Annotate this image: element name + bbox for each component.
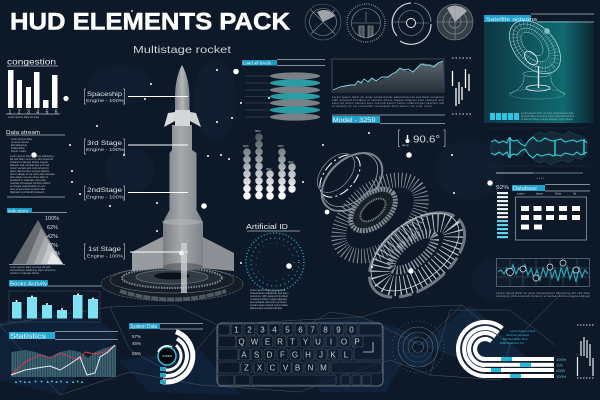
books activity tab: [9, 280, 48, 286]
artificial ID heading: Artificial ID: [246, 222, 289, 231]
statistics tab: [9, 332, 55, 339]
key outlines: [218, 324, 382, 385]
chart caption: Lorem ipsum dolor sit amet consectetuer adipiscing elit sed diam nonummy: [332, 95, 445, 99]
number row: 2: [247, 326, 252, 334]
column labels: [243, 129, 294, 171]
white bars: [485, 357, 554, 378]
home row: K: [330, 350, 336, 360]
rocket collar: [175, 110, 190, 126]
data stream text: molestie consequat vel illum dolore: [10, 181, 51, 185]
bottom wave: [491, 149, 587, 158]
temperature readout: [398, 130, 445, 147]
temperature readout: 90.6°: [413, 134, 440, 146]
data stream text: elit sed diam nonummy nibh euismod: [10, 157, 53, 161]
satellite tab: [484, 15, 531, 22]
turbine nodes: [325, 210, 414, 274]
row labels: 100: [556, 362, 563, 368]
data stream text: tincidunt ut laoreet dolore magna: [10, 160, 48, 164]
qwerty row: T: [290, 338, 295, 346]
panel: model bar: Model - 3259: [332, 117, 376, 124]
panel: waveform: [488, 128, 590, 180]
percent labels: 100%: [45, 216, 59, 222]
scale: [496, 172, 583, 174]
leader lines: [245, 76, 271, 117]
front housing: [354, 196, 480, 314]
bottom row: N: [308, 364, 314, 372]
white rings: [458, 322, 502, 376]
faint world map: [88, 60, 528, 302]
data stream text: minim veniam quis nostrud exerci: [10, 166, 49, 170]
data stream text: Nulla facilisi: [11, 146, 25, 150]
column headers: Dolor: [555, 192, 561, 196]
area fill: [333, 61, 444, 91]
home row: [241, 350, 349, 360]
icon: thermometer: [406, 135, 408, 141]
bottom row: Z: [244, 364, 249, 372]
label: 3rd stage: 3rd Stage: [87, 140, 122, 147]
caption: [10, 265, 56, 275]
column labels: 62%: [243, 144, 249, 148]
panel: data stream: [6, 130, 65, 197]
database tab: [512, 185, 545, 191]
database box: [516, 197, 586, 240]
panel: waveform: • • • •: [537, 176, 544, 180]
ID caption: erat volutpat wisi enim ad minim: [250, 300, 287, 304]
data stream text: duis autem vel eum iriure dolor in: [10, 175, 49, 179]
pyramid: [12, 220, 63, 264]
label: 2nd stage: Engine - 100%: [86, 194, 125, 200]
ring labels: Sit Amet Consect: [506, 333, 529, 337]
data stream text: Lorem ipsum dolor: [11, 137, 33, 141]
qwerty row: U: [315, 338, 321, 346]
ID caption: ullamcorper suscipit lobortis: [250, 306, 283, 310]
number row: [234, 326, 354, 334]
label: 1st stage: Engine - 100%: [87, 254, 124, 260]
home row: A: [241, 350, 247, 360]
outer spoke fan: [325, 165, 435, 271]
data stream text: hendrerit in vulputate velit esse: [10, 178, 46, 182]
panel: books activity bar chart: Books Activity: [10, 282, 47, 288]
ID caption: ut laoreet dolore magna aliquam: [250, 297, 287, 301]
qwerty row: R: [277, 338, 283, 346]
panel: C-shaped ring chart: [458, 322, 567, 379]
bottom row: [244, 364, 327, 372]
dotted ring: [246, 233, 304, 291]
caption: tincidunt ut laoreet dolore: [10, 271, 40, 275]
panel: database: [496, 184, 590, 240]
column headers: [517, 192, 576, 196]
panel: artificial ID: [246, 222, 304, 310]
panel: area line chart: [332, 59, 445, 108]
indicators tab: [7, 208, 32, 213]
qwerty row: Q: [238, 338, 245, 346]
data stream text: sit amet consec: [11, 140, 30, 144]
ID caption: nonummy nibh euismod tincidunt: [250, 294, 288, 298]
panel: load levels ellipse stack: Load all levels: [243, 60, 272, 66]
data stream heading: Data stream: [6, 130, 40, 136]
column labels: 40%: [288, 160, 294, 164]
number row: 9: [336, 326, 341, 334]
panel: statistics chart: Statistics: [10, 334, 47, 340]
candlestick glyph: [452, 58, 471, 114]
wave spikes: [510, 137, 584, 158]
home row: H: [305, 350, 311, 360]
icon: lock row: [490, 113, 519, 120]
percent labels: 42%: [47, 234, 58, 240]
red line: [11, 347, 113, 375]
bottom row: C: [270, 364, 276, 372]
row labels: 2000: [556, 368, 566, 373]
chart caption: [332, 95, 445, 108]
home row: S: [254, 350, 259, 360]
bottom row: M: [320, 364, 327, 372]
qwerty row: P: [354, 338, 360, 346]
faint envelope: [491, 131, 587, 165]
rocket labels: [84, 89, 125, 260]
radar gauges: [305, 3, 473, 44]
satellite caption: elit sed diam nonummy nibh euismod tincidunt: [521, 114, 574, 118]
price line: [333, 61, 443, 90]
columns: [247, 137, 292, 196]
white line: [11, 345, 115, 375]
home row: L: [344, 350, 349, 360]
front inner grid: [386, 227, 440, 277]
label: 3rd stage: Engine - 100%: [86, 147, 125, 153]
congestion heading: congestion: [7, 56, 56, 66]
qwerty row: O: [341, 338, 347, 346]
icon: satellite dish wireframe: [499, 11, 571, 99]
satellite caption: Lorem ipsum dolor sit amet consectetuer adip: [521, 111, 574, 115]
signal caption: [496, 291, 590, 298]
data stream text: Lorem ipsum dolor sit amet adipiscing: [10, 154, 54, 158]
number row: 8: [323, 326, 328, 334]
panel: load levels ellipse stack: [242, 60, 325, 121]
satellite caption: ut laoreet dolore magna aliquam erat volutpa: [521, 117, 573, 121]
temperature readout: temp: [402, 143, 409, 147]
panel: books activity bar chart: [9, 280, 101, 322]
home row: F: [280, 350, 285, 360]
chart caption: ut aliquip ex ea commodo consequat duis autem vel eum iriure: [332, 104, 433, 108]
label: 1st stage: 1st Stage: [88, 246, 121, 253]
panel: signal chart: [496, 258, 590, 298]
rear rings: [310, 147, 362, 199]
title: HUD ELEMENTS PACK: [10, 8, 291, 36]
gauge 2: [347, 4, 385, 42]
panel: model bar: [332, 115, 445, 124]
data stream text: tation ullamcorper suscipit lobortis: [10, 169, 50, 173]
signal caption: nonummy nibh euismod tincidunt ut laoreet dolore magna aliquam: [496, 294, 590, 298]
percent labels: 15%: [49, 251, 60, 257]
signal trace: [498, 265, 588, 282]
row labels: 100%: [556, 374, 567, 379]
load levels tab: [242, 60, 277, 66]
ring labels: Elit Sed Diam Non: [503, 337, 528, 341]
qwerty row: W: [251, 338, 259, 346]
system data tab: [129, 323, 160, 329]
label: 2nd stage: 2ndStage: [87, 187, 122, 194]
label: spaceship: Spaceship: [87, 91, 122, 98]
grid: [488, 128, 590, 166]
donut centre: [158, 347, 176, 365]
qwerty row: I: [330, 338, 332, 346]
data stream text: nisl ut aliquip ex ea commodo consequ: [10, 172, 55, 176]
rocket: [128, 65, 234, 293]
chart caption: nibh euismod tincidunt ut laoreet dolore magna aliquam erat volutpat wisi: [332, 98, 444, 102]
bottom row: B: [295, 364, 300, 372]
percent labels: 57%: [132, 334, 141, 339]
percent labels: [45, 216, 60, 257]
data stream text: dignissim qui blandit praesent: [10, 190, 44, 194]
home row: D: [267, 350, 273, 360]
bottom row: V: [283, 364, 289, 372]
panel: system data donut: LOREM: [162, 354, 173, 358]
label: 1st stage: [84, 244, 124, 260]
launch platform rings: [101, 267, 243, 301]
star dots: [31, 10, 493, 269]
satellite caption: [521, 111, 574, 121]
data stream text: [10, 137, 55, 194]
background blue network polygons: [0, 295, 560, 395]
cyan insets: [491, 357, 531, 378]
rocket fins lower: [132, 236, 164, 271]
column labels: 90%: [255, 129, 261, 133]
donut arcs: [162, 332, 193, 382]
signal grid: [496, 258, 590, 286]
top wave: [491, 137, 587, 146]
label: spaceship: Engine - 100%: [86, 98, 125, 104]
row labels: 100%: [556, 357, 567, 362]
turbine wireframe: [310, 141, 480, 314]
qwerty row: [238, 338, 360, 346]
keyboard frame: [217, 323, 383, 386]
column headers: Lorem: [517, 192, 524, 196]
panel: indicators pyramid: Indicators: [8, 208, 29, 214]
number row: 1: [234, 326, 239, 334]
caption: Lorem ipsum dolor sit amet elit sed: [10, 265, 51, 269]
percent labels: 45%: [132, 341, 141, 346]
percent labels: 55%: [132, 351, 141, 356]
home row: J: [319, 350, 323, 360]
percent labels: 27%: [47, 243, 58, 249]
panel: satellite antenna: Satellite antenna: [486, 17, 538, 23]
panel: congestion bar chart: Lorem ipsum dolor sit amet: [8, 115, 40, 119]
qwerty row: Y: [303, 338, 309, 346]
data stream text: eu feugiat nulla facilisis at vero: [10, 184, 46, 188]
middle ring: [343, 181, 403, 239]
legend: [160, 367, 166, 384]
rocket lines: [128, 96, 188, 252]
data stream text: eros et accumsan et iusto odio: [10, 187, 46, 191]
label: spaceship: [84, 89, 125, 104]
ring labels: Lorem Ipsum Dolor: [510, 329, 536, 333]
caption: consectetuer adipiscing diam nonummy: [10, 268, 56, 272]
gauge 1: [305, 4, 341, 40]
row labels: [556, 357, 567, 379]
gauge 4: [437, 4, 473, 40]
rocket booster: [163, 125, 203, 270]
ID caption: veniam quis nostrud exerci tation: [250, 303, 288, 307]
home row: G: [292, 350, 298, 360]
panel: system data donut: System Data: [130, 324, 157, 330]
panel background: [484, 21, 594, 123]
column labels: 62%: [278, 144, 284, 148]
number row: 3: [260, 326, 265, 334]
bottom row: X: [257, 364, 263, 372]
signal caption: Lorem ipsum dolor sit amet consectetuer adipiscing elit sed diam: [496, 291, 590, 295]
label: 2nd stage: [84, 186, 125, 200]
rocket upper fins: [164, 112, 175, 127]
bars: [8, 70, 58, 108]
ID caption: [250, 288, 288, 310]
number row: 0: [349, 326, 354, 334]
axis numbers: 1 2 3 4 5 6: [8, 110, 58, 116]
gauge 3: [392, 3, 431, 44]
subtitle: Multistage rocket: [133, 45, 231, 56]
percent labels: 62%: [47, 225, 58, 231]
data stream text: aliquam erat volutpat wisi enim ad: [10, 163, 50, 167]
panel: hexagon column chart: [243, 129, 294, 196]
panel: indicators pyramid: [7, 208, 67, 275]
panel: satellite antenna: [484, 11, 594, 123]
column labels: 30%: [266, 167, 272, 171]
ring labels: [500, 329, 536, 345]
signal markers: [506, 260, 579, 281]
percent labels: [132, 334, 141, 356]
cells: [521, 206, 580, 230]
number row: 5: [285, 326, 290, 334]
stripes: [497, 192, 508, 218]
data stream text: Elit adipiscing: [11, 143, 27, 147]
ring labels: Nibh Euismod Tin: [500, 341, 524, 345]
column headers: Sit: [573, 192, 576, 196]
light column: [181, 243, 187, 293]
small bar glyph: [577, 325, 594, 378]
stacked disks: [270, 72, 320, 121]
panel: congestion bar chart: [6, 56, 60, 119]
number row: 4: [272, 326, 277, 334]
panel: database: Database: [513, 186, 537, 192]
panel: statistics chart: [9, 332, 118, 384]
panel: system data donut: [129, 323, 203, 384]
label: 3rd stage: [84, 139, 125, 154]
ID caption: consectetuer adipiscing sed diam: [250, 291, 288, 295]
bars: [12, 295, 98, 318]
front spokes: [369, 209, 465, 299]
number row: 6: [298, 326, 303, 334]
rocket nose: [175, 65, 190, 112]
data stream text: Donec mattis: [11, 149, 27, 153]
area bands: [11, 345, 116, 377]
qwerty row: E: [265, 338, 270, 346]
column headers: Ipsum: [536, 192, 543, 196]
concentric scope: [392, 321, 444, 373]
keyboard: [217, 323, 383, 386]
number row: 7: [310, 326, 315, 334]
ID caption: Lorem ipsum dolor sit amet elit: [250, 288, 286, 292]
database percent: 92%: [496, 185, 510, 191]
markers: ▲▼▲▲ ▼ ▼ ▲▼▲▼ ▲ ▲▼▲: [14, 379, 84, 384]
chart caption: enim ad minim veniam quis nostrud exerci tation ullamcorper suscipit nisl: [332, 101, 444, 105]
enter glyph: [363, 342, 373, 352]
